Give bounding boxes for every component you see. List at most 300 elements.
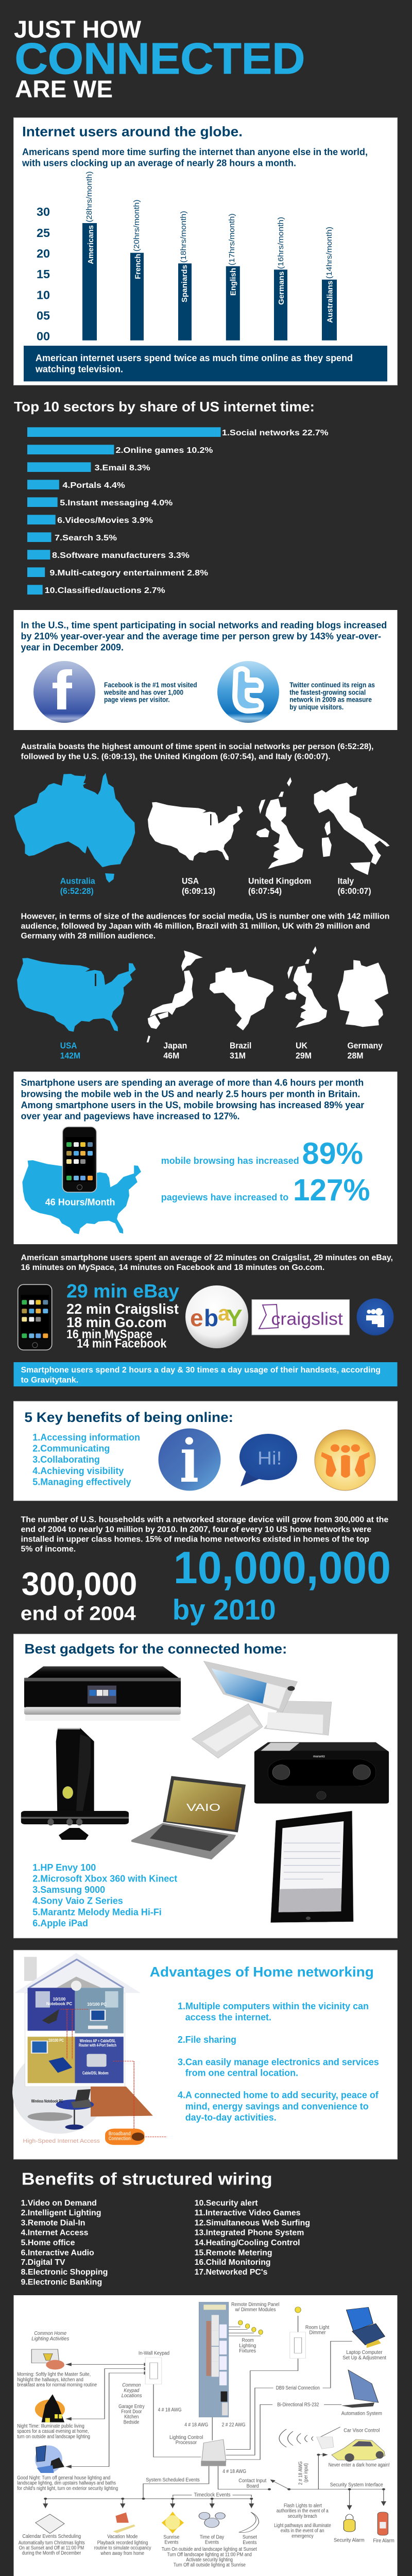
label: 46 hours per month: 46 Hours/Month <box>45 1197 115 1207</box>
labels: scheduled events: Turn Off landscape lighting at 11:00 PM and <box>167 2552 252 2557</box>
title: JUST HOW <box>14 16 141 43</box>
list: wiring benefits left: 9.Electronic Banking <box>21 2278 102 2286</box>
list: wiring benefits left: 8.Electronic Shopping <box>21 2268 108 2277</box>
chart y axis labels: 05 <box>37 309 50 323</box>
bar chart: top 10 sectors: 5.Instant messaging 4.0% <box>60 499 173 507</box>
list: gadgets <box>32 1862 177 1928</box>
stat: 10,000,000 by 2010 <box>173 1542 391 1625</box>
labels: wiring components: 2 # 22 AWG <box>222 2422 246 2428</box>
map labels: audience: 142M <box>60 1051 80 1061</box>
list: wiring benefits right: 15.Remote Metering <box>195 2248 272 2257</box>
map labels: audience: Brazil <box>230 1041 251 1050</box>
labels: wiring components: Fixtures <box>239 2348 256 2354</box>
bar: english <box>226 213 240 341</box>
map labels: time per person: (6:07:54) <box>248 886 282 896</box>
list: wiring benefits right <box>195 2199 310 2277</box>
icon: iphone small <box>18 1284 52 1350</box>
labels: scheduled events: Turn Off all outside lighting at Sunrise <box>174 2563 246 2568</box>
labels: wiring components: Lighting Control <box>169 2435 203 2441</box>
bar chart: top 10 sectors: 2.Online games 10.2% <box>115 446 213 455</box>
list: benefits: 4.Achieving visibility <box>32 1466 124 1476</box>
labels: wiring components: Contact Input <box>238 2478 266 2484</box>
labels: wiring components: Processor <box>176 2440 197 2446</box>
icons: contact dots <box>44 2454 385 2500</box>
labels: scheduled events: Vacation Mode <box>107 2534 138 2539</box>
stat: pageviews 127%: pageviews have increased to <box>161 1192 288 1202</box>
icon: info <box>159 1428 220 1491</box>
list: gadgets: 2.Microsoft Xbox 360 with Kinect <box>32 1873 177 1884</box>
labels: scheduled events: when away from home <box>100 2551 144 2556</box>
stat: 10,000,000 by 2010: by 2010 <box>173 1593 276 1625</box>
labels: lighting activities: Lighting Activities <box>31 2336 69 2342</box>
map: australia <box>14 773 135 883</box>
map labels: audience: Japan <box>163 1041 187 1050</box>
stat list: minutes by site <box>66 1280 179 1351</box>
text block: networked storage: 5% of income. <box>21 1545 76 1554</box>
map: italy <box>314 783 390 875</box>
label: vaio brand: VAIO <box>186 1802 220 1814</box>
list: advantages: day-to-day activities. <box>185 2112 277 2123</box>
labels: wiring components: Garage Entry <box>118 2404 145 2410</box>
text block: audience size: Germany with 28 million audience. <box>21 932 156 941</box>
labels: wiring components <box>118 2302 390 2489</box>
labels: wiring components: Laptop Computer <box>346 2350 383 2355</box>
list: benefits <box>32 1432 140 1487</box>
labels: wiring components: Board <box>247 2483 259 2489</box>
labels: wiring components: In-Wall Keypad <box>139 2350 169 2356</box>
map labels: audience: UK <box>296 1041 308 1050</box>
map: usa blue <box>17 958 136 1032</box>
stat list: minutes by site: 22 min Craigslist <box>66 1301 179 1317</box>
diagram: wiring lines <box>45 2316 384 2510</box>
title <box>14 16 305 103</box>
list: wiring benefits left: 4.Internet Access <box>21 2229 89 2238</box>
text block: audience size <box>21 912 389 941</box>
bar chart: top 10 sectors: 8.Software manufacturers 3.3% <box>52 551 190 560</box>
list: wiring benefits right: 13.Integrated Phone System <box>195 2229 304 2238</box>
heading: advantages: Advantages of Home networking <box>150 1964 374 1980</box>
labels: lighting activities: Common Home <box>34 2331 66 2336</box>
map labels: time per person: Italy <box>338 876 354 886</box>
labels: lighting activities: for child's night light, turn on exterior security lighting <box>17 2486 118 2492</box>
diagram: networked house: Wireless AP + Cable/DSL <box>80 2039 116 2043</box>
labels: scheduled events <box>19 2492 394 2568</box>
stat: 10,000,000 by 2010: 10,000,000 <box>174 1542 391 1593</box>
labels: scheduled events: Calendar Events Scheduling <box>22 2534 81 2539</box>
stat: 300,000 end of 2004: 300,000 <box>22 1566 137 1602</box>
gadget: xbox 360 with kinect <box>21 1728 129 1840</box>
labels: scheduled events: authorities in the event of a <box>277 2509 329 2514</box>
stat: mobile browsing 89%: 89% <box>302 1137 363 1171</box>
title: CONNECTED <box>14 35 305 83</box>
callout: twice as much time as tv: watching television. <box>35 364 123 375</box>
labels: wiring components: Bedside <box>124 2419 140 2425</box>
diagram: networked house: Notebook PC <box>46 2002 72 2006</box>
bar chart: top 10 sectors <box>27 427 329 595</box>
text block: smartphone users: Smartphone users are spending an average of more than 4.6 hours per month <box>21 1078 364 1088</box>
text block: networked storage <box>21 1515 388 1554</box>
stat: mobile browsing 89% <box>161 1137 363 1171</box>
bar: french <box>130 199 144 341</box>
icon: facebook <box>33 661 95 723</box>
text block: australia boasts <box>21 742 374 761</box>
labels: lighting activities: spaces for a casual evening at home, <box>17 2429 89 2434</box>
labels: wiring components: Never enter a dark home again! <box>329 2463 390 2468</box>
labels: wiring components: System Scheduled Events <box>146 2478 200 2483</box>
bar: spaniards: (18hrs/month) <box>179 211 188 263</box>
map: uk <box>256 777 303 869</box>
map: japan <box>147 951 203 1042</box>
list: benefits: 1.Accessing information <box>32 1432 140 1443</box>
labels: wiring components: Room Light <box>305 2325 329 2331</box>
labels: wiring components: 4 # 18 AWG <box>158 2408 182 2413</box>
labels: lighting activities: Morning: Softly light the Master Suite, <box>17 2372 91 2378</box>
labels: lighting activities: turn on outside and landscape lighting <box>17 2434 90 2439</box>
labels: scheduled events: security breach <box>288 2514 317 2519</box>
bar: germans <box>274 217 287 341</box>
icon: speech bubble <box>239 1434 297 1486</box>
icon: ebay ball: a <box>218 1301 230 1325</box>
icon: automation system <box>341 2370 379 2408</box>
callout: twice as much time as tv <box>24 346 387 381</box>
bar: germans: (16hrs/month) <box>277 217 285 269</box>
labels: scheduled events: Flash Lights to alert <box>284 2503 322 2509</box>
text block: audience size: However, in terms of size of the audiences for social media, US is number one with 142 million <box>21 912 389 921</box>
list: wiring benefits right: 10.Security alert <box>195 2199 258 2208</box>
diagram: networked house: 10/100 PC <box>48 2038 64 2043</box>
icon: twitter <box>217 661 279 723</box>
gadget: marantz hi-fi <box>254 1742 389 1804</box>
text block: networked storage: The number of U.S. households with a networked storage device will grow from 300,000 at the <box>21 1515 388 1524</box>
bar chart: top 10 sectors: 1.Social networks 22.7% <box>222 429 329 437</box>
heading: internet users: Internet users around the globe. <box>22 124 243 139</box>
chart y axis labels: 30 <box>37 205 50 218</box>
bar chart: top 10 sectors: 3.Email 8.3% <box>95 464 150 472</box>
diagram: networked house: Connection <box>109 2136 131 2142</box>
panel: smartphone browsing <box>13 1072 398 1244</box>
callout: twice as much time as tv: American internet users spend twice as much time online as they spend <box>36 353 353 363</box>
list: wiring benefits left: 1.Video on Demand <box>21 2199 97 2208</box>
bar: english: English <box>230 268 238 296</box>
bar: spaniards <box>178 211 192 341</box>
list: gadgets: 1.HP Envy 100 <box>32 1862 96 1873</box>
text block: smartphone users: Among smartphone users in the US, mobile browsing has increased 89% year <box>21 1100 364 1110</box>
text block: americans spend more time: Americans spend more time surfing the internet than anyone else in the world, <box>22 147 368 157</box>
labels: wiring components: (per input) <box>303 2463 309 2482</box>
list: wiring benefits right: 17.Networked PC's <box>195 2268 267 2277</box>
labels: scheduled events: Sunrise <box>163 2535 180 2540</box>
label: marantz brand: marantz <box>313 1755 325 1758</box>
labels: scheduled events: Security Alarm <box>334 2538 365 2544</box>
chart y axis labels: 15 <box>37 267 50 281</box>
labels: wiring components: Set Up & Adjustment <box>342 2355 386 2361</box>
labels: wiring components: Locations <box>122 2393 142 2399</box>
text block: minutes per site <box>21 1253 393 1272</box>
bar chart: top 10 sectors: 9.Multi-category entertainment 2.8% <box>49 569 208 578</box>
labels: wiring components: 4 # 18 AWG <box>184 2422 208 2428</box>
diagram: arrowheads <box>43 2363 386 2510</box>
panel: best gadgets <box>13 1634 398 1938</box>
icon: myspace <box>356 1298 393 1335</box>
map labels: time per person: (6:52:28) <box>60 886 94 896</box>
list: wiring benefits right: 12.Simultaneous Web Surfing <box>195 2218 310 2227</box>
component: lighting control processor <box>201 2439 226 2466</box>
text block: time spent increased: year in December 2009. <box>21 642 124 653</box>
text block: minutes per site: American smartphone users spent an average of 22 minutes on Craigslist, 29 minutes on eBay, <box>21 1253 393 1262</box>
text block: australia boasts: Australia boasts the highest amount of time spent in social networks per person (6:52:28), <box>21 742 374 751</box>
stat list: minutes by site: 29 min eBay <box>66 1280 179 1301</box>
logo: craigslist <box>252 1299 349 1335</box>
map labels: time per person: (6:00:07) <box>338 886 371 896</box>
map labels: audience: 46M <box>163 1051 179 1061</box>
list: gadgets: 4.Sony Vaio Z Series <box>32 1896 123 1906</box>
map labels: audience: 29M <box>296 1051 312 1061</box>
map labels: audience: USA <box>60 1041 77 1050</box>
text block: networked storage: installed in upper class homes. 15% of media home networks existed in homes of the top <box>21 1535 369 1544</box>
chart y axis labels: 00 <box>37 330 50 343</box>
panel: lighting control wiring diagram <box>13 2295 398 2576</box>
callout: gravitytank: to Gravitytank. <box>21 1376 78 1384</box>
panel: key benefits <box>13 1401 398 1501</box>
labels: wiring components: Remote Dimming Panel <box>231 2302 279 2308</box>
labels: scheduled events: Events <box>243 2540 256 2546</box>
list: advantages: mind, energy savings and convenience to <box>185 2101 369 2111</box>
icon: ebay ball: e <box>190 1304 203 1331</box>
diagram: networked house <box>12 1953 167 2145</box>
icons: timeclock events <box>36 2512 388 2535</box>
bar: australians: Australians <box>326 281 334 323</box>
list: wiring benefits left: 5.Home office <box>21 2239 75 2247</box>
list: gadgets: 3.Samsung 9000 <box>32 1885 105 1895</box>
list: wiring benefits left: 6.Interactive Audio <box>21 2248 94 2257</box>
bar: americans <box>82 171 97 341</box>
labels: wiring components: Front Door <box>121 2409 142 2415</box>
bar chart: top 10 sectors: 7.Search 3.5% <box>55 534 117 543</box>
map: germany <box>338 960 388 1027</box>
list: advantages: 4.A connected home to add security, peace of <box>178 2090 379 2100</box>
bar: americans: (28hrs/month) <box>85 171 94 223</box>
callout: gravitytank <box>13 1362 398 1386</box>
icon: iphone <box>62 1127 96 1192</box>
chart y axis labels: 10 <box>37 289 50 302</box>
chart y axis labels: 20 <box>37 247 50 260</box>
labels: scheduled events: Time of Day <box>200 2535 224 2540</box>
list: advantages: 1.Multiple computers within the vicinity can <box>178 2001 369 2011</box>
list: wiring benefits right: 14.Heating/Cooling Control <box>195 2239 300 2247</box>
map: brazil <box>210 968 273 1030</box>
stat list: minutes by site: 18 min Go.com <box>66 1314 166 1330</box>
logo: craigslist: craigslist <box>271 1310 343 1329</box>
icon: car and visor control <box>317 2437 385 2462</box>
map labels: audience <box>60 1041 383 1061</box>
chart y axis labels <box>37 205 50 343</box>
gadget: hp printer <box>24 1666 181 1721</box>
labels: scheduled events: Turn On outside and landscape lighting at Sunset <box>162 2547 257 2552</box>
bar: french: (20hrs/month) <box>132 199 141 251</box>
list: advantages <box>178 2001 379 2123</box>
diagram: networked house: Router with 4-Port Switch <box>79 2043 116 2048</box>
labels: scheduled events: Light pathways and illuminate <box>274 2523 331 2529</box>
list: benefits: 2.Communicating <box>32 1444 110 1454</box>
component: keypad and dimmer <box>145 2332 305 2384</box>
map: usa behind phone <box>22 1160 141 1234</box>
labels: lighting activities <box>17 2331 118 2492</box>
list: wiring benefits left <box>21 2199 108 2286</box>
text block: networked storage: end of 2004 to nearly 10 million by 2010. In 2007, four of every 10 US home networks were <box>21 1525 371 1534</box>
bar chart: hours per month by nationality <box>37 171 337 343</box>
bar: australians: (14hrs/month) <box>325 227 334 279</box>
panel: internet users around the globe <box>13 117 398 385</box>
list: advantages: 2.File sharing <box>178 2035 236 2045</box>
map labels: time per person: USA <box>182 876 199 886</box>
gadget: ipad <box>271 1811 353 1923</box>
icon: lotus <box>315 1430 375 1490</box>
list: gadgets: 6.Apple iPad <box>32 1918 88 1928</box>
icon: speech bubble: Hi! <box>258 1448 282 1469</box>
heading: key benefits: 5 Key benefits of being online: <box>24 1410 233 1425</box>
labels: wiring components: 2 # 18 AWG <box>298 2461 304 2485</box>
text block: smartphone users: browsing the mobile web in the US and nearly 2.5 hours per month in Britain. <box>21 1089 360 1099</box>
labels: lighting activities: Good Night: Turn off general house lighting and <box>17 2476 110 2481</box>
labels: wiring components: Common <box>122 2383 141 2388</box>
labels: wiring components: Car Visor Control <box>344 2428 380 2434</box>
map labels: audience: 28M <box>347 1051 364 1061</box>
panel: social networks growth <box>13 610 398 730</box>
labels: lighting activities: Night Time: Illuminate public living <box>17 2424 84 2429</box>
heading: benefits of structured wiring: Benefits of structured wiring <box>22 2170 272 2189</box>
list: wiring benefits left: 2.Intelligent Lighting <box>21 2209 101 2217</box>
map labels: audience: Germany <box>347 1041 383 1050</box>
heading: best gadgets: Best gadgets for the connected home: <box>24 1641 287 1656</box>
list: wiring benefits left: 3.Remote Dial-In <box>21 2218 85 2227</box>
text block: smartphone users <box>21 1078 364 1122</box>
labels: scheduled events: Activate security lighting <box>186 2557 233 2563</box>
list: advantages: from one central location. <box>185 2067 298 2078</box>
text block: audience size: audience, followed by Japan with 46 million, Brazil with 31 million, UK with 29 million and <box>21 922 370 931</box>
labels: scheduled events: Events <box>164 2540 178 2546</box>
icons: light bulbs <box>238 2307 301 2334</box>
stat: 300,000 end of 2004: end of 2004 <box>21 1603 136 1624</box>
labels: wiring components: Dimmer <box>309 2330 326 2336</box>
heading: top 10 sectors: Top 10 sectors by share of US internet time: <box>14 399 315 414</box>
text block: smartphone users: over year and pageviews have increased to 127%. <box>21 1111 240 1122</box>
map labels: time per person: Australia <box>60 876 95 886</box>
labels: wiring components: Automation System <box>341 2411 382 2416</box>
labels: lighting activities: breakfast area for normal morning routine <box>17 2382 97 2388</box>
map labels: audience: 31M <box>230 1051 246 1061</box>
bar chart: top 10 sectors: 4.Portals 4.4% <box>62 481 125 490</box>
map labels: time per person: United Kingdom <box>248 876 311 886</box>
labels: wiring components: w/ Dimmer Modules <box>235 2307 276 2313</box>
text block: americans spend more time: with users clocking up an average of nearly 28 hours a month. <box>22 158 296 168</box>
list: wiring benefits left: 7.Digital TV <box>21 2258 65 2267</box>
text block: twitter fact: Twitter continued its reign as <box>289 681 375 689</box>
labels: scheduled events: during the Month of December <box>22 2551 81 2556</box>
stat: pageviews 127% <box>161 1173 370 1207</box>
labels: wiring components: Room <box>242 2338 254 2344</box>
text block: americans spend more time <box>22 147 368 168</box>
text block: time spent increased: by 210% year-over-year and the average time per person grew by 143% year-over- <box>21 631 381 641</box>
map: uk small <box>285 946 327 1028</box>
panel: advantages of home networking <box>12 1950 398 2159</box>
diagram: networked house: Cable/DSL Modem <box>82 2071 109 2076</box>
text block: facebook fact: page views per visitor. <box>104 696 170 704</box>
diagram: networked house: Wireless Notebook PC <box>31 2099 63 2104</box>
icon: ebay ball <box>185 1285 248 1348</box>
list: gadgets: 5.Marantz Melody Media Hi-Fi <box>32 1907 162 1917</box>
labels: scheduled events: Fire Alarm <box>373 2538 394 2544</box>
bar chart: top 10 sectors: 6.Videos/Movies 3.9% <box>57 516 153 525</box>
icon: ebay ball: Y <box>227 1304 243 1331</box>
labels: lighting activities: landscape lighting, dim upstairs hallways and baths <box>17 2481 116 2486</box>
labels: scheduled events: routine to simulate occupancy <box>94 2546 151 2551</box>
map: usa white <box>148 802 243 861</box>
labels: wiring components: Lighting <box>239 2343 256 2349</box>
stat list: minutes by site: 16 min MySpace <box>66 1327 152 1341</box>
list: benefits: 5.Managing effectively <box>32 1477 131 1487</box>
text block: minutes per site: 16 minutes on MySpace, 14 minutes on Facebook and 18 minutes on Go.com. <box>21 1263 324 1272</box>
stat list: minutes by site: 14 min Facebook <box>77 1337 167 1351</box>
callout: gravitytank: Smartphone users spend 2 hours a day & 30 times a day usage of their handsets, according <box>21 1366 381 1375</box>
labels: wiring components: Bi-Directional RS-232 <box>277 2402 319 2408</box>
text block: twitter fact: by unique visitors. <box>289 703 344 711</box>
bar: germans: Germans <box>278 272 286 305</box>
text block: twitter fact: network in 2009 as measure <box>289 696 372 704</box>
bar: french: French <box>134 254 142 279</box>
labels: wiring components: 4 # 18 AWG <box>222 2469 246 2475</box>
labels: lighting activities: highlight the hallways, kitchen and <box>17 2377 83 2383</box>
stat: pageviews 127%: 127% <box>293 1173 370 1207</box>
labels: wiring components: DB9 Serial Connection <box>276 2385 320 2391</box>
diagram: networked house: Broadband <box>109 2131 131 2137</box>
labels: scheduled events: Automatically turn Christmas lights <box>19 2540 85 2546</box>
bar: americans: Americans <box>87 225 95 264</box>
text block: twitter fact <box>289 681 375 711</box>
component: dimming panel <box>199 2302 229 2417</box>
text block: time spent increased <box>21 620 387 653</box>
text block: time spent increased: In the U.S., time spent participating in social networks and reading blogs increased <box>21 620 387 630</box>
chart y axis labels: 25 <box>37 226 50 240</box>
stat: mobile browsing 89%: mobile browsing has increased <box>161 1156 299 1166</box>
icon: laptop computer <box>346 2307 385 2348</box>
labels: scheduled events: Sunset <box>243 2535 257 2540</box>
gadget: samsung q1 <box>192 1661 332 1758</box>
list: benefits: 3.Collaborating <box>32 1454 100 1465</box>
bar: australians <box>322 227 337 341</box>
labels: scheduled events: Events <box>205 2540 219 2546</box>
list: advantages: access the internet. <box>185 2012 271 2023</box>
labels: scheduled events: emergency <box>291 2533 314 2539</box>
icons: lighting activities <box>31 2349 65 2473</box>
text block: facebook fact: Facebook is the #1 most visited <box>104 681 197 689</box>
icon: ebay ball: b <box>204 1304 218 1331</box>
list: wiring benefits right: 11.Interactive Video Games <box>195 2209 301 2217</box>
labels: wiring components: Keypad <box>124 2388 140 2394</box>
bar: english: (17hrs/month) <box>228 213 236 265</box>
gadget: vaio laptop <box>131 1776 246 1859</box>
labels: wiring components: Kitchen <box>124 2414 139 2420</box>
bar: spaniards: Spaniards <box>181 265 189 302</box>
text block: facebook fact <box>104 681 197 704</box>
labels: scheduled events: Timeclock Events <box>194 2492 230 2498</box>
title: ARE WE <box>15 76 113 103</box>
labels: scheduled events: Playback recorded lighting <box>97 2540 148 2546</box>
stat: 300,000 end of 2004 <box>21 1566 137 1624</box>
text block: twitter fact: the fastest-growing social <box>289 688 366 696</box>
diagram: networked house: High-Speed Internet Access <box>23 2138 100 2144</box>
diagram: networked house: 10/100 <box>53 1997 66 2002</box>
list: advantages: 3.Can easily manage electronics and services <box>178 2057 379 2067</box>
